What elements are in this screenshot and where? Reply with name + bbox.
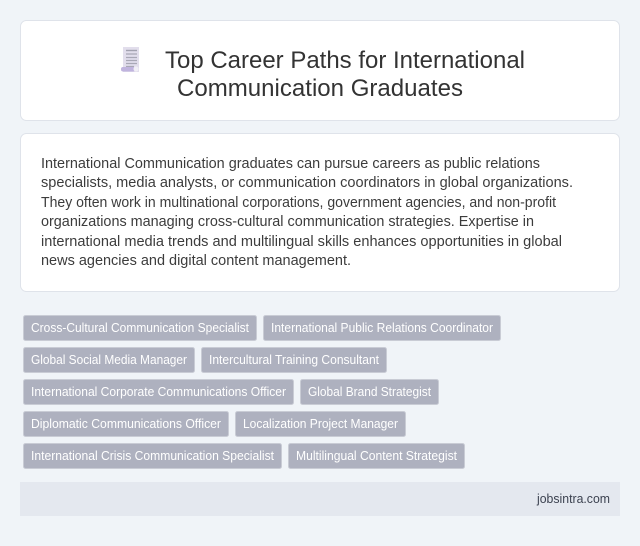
tag: Global Social Media Manager (24, 348, 194, 372)
tag: Localization Project Manager (236, 412, 406, 436)
footer source text: jobsintra.com (536, 491, 610, 506)
tag: Intercultural Training Consultant: Intercultural Training Consultant (209, 352, 379, 367)
icon: document scroll (121, 47, 139, 72)
tag: Cross-Cultural Communication Specialist: Cross-Cultural Communication Specialist (31, 320, 249, 335)
tag: Global Brand Strategist (300, 380, 438, 404)
tag: Multilingual Content Strategist: Multilingual Content Strategist (296, 448, 457, 463)
panel: title card (20, 20, 620, 120)
description text: They often work in multinational corporations, government agencies, and non-profit (41, 195, 556, 211)
title text: Communication Graduates (177, 75, 463, 102)
tag: Cross-Cultural Communication Specialist (24, 316, 256, 340)
tag: Diplomatic Communications Officer: Diplomatic Communications Officer (31, 416, 222, 431)
tag: Intercultural Training Consultant (202, 348, 386, 372)
title text (165, 47, 525, 102)
tag: International Corporate Communications Officer (24, 380, 294, 404)
tag: Diplomatic Communications Officer (24, 412, 228, 436)
title text: Top Career Paths for International (165, 47, 525, 74)
tag: Global Brand Strategist: Global Brand Strategist (308, 384, 431, 399)
tag: Global Social Media Manager: Global Social Media Manager (31, 352, 188, 367)
description text: specialists, media analysts, or communication coordinators in global organizations. (41, 175, 573, 191)
description text: news agencies and digital content management. (41, 253, 351, 269)
description text: international media trends and multilingual skills enhances opportunities in global (41, 234, 562, 250)
tag: Localization Project Manager: Localization Project Manager (243, 416, 399, 431)
career tags (24, 316, 500, 468)
tag: International Corporate Communications Officer: International Corporate Communications Officer (31, 384, 287, 399)
tag: International Crisis Communication Specialist: International Crisis Communication Specialist (31, 448, 274, 463)
tag: International Public Relations Coordinator: International Public Relations Coordinator (271, 320, 494, 335)
tag: Multilingual Content Strategist (288, 444, 464, 468)
tag: International Public Relations Coordinator (264, 316, 500, 340)
panel: description (20, 134, 620, 292)
description text: International Communication graduates can pursue careers as public relations (41, 156, 540, 172)
footer bar (20, 482, 620, 516)
description text (41, 156, 573, 269)
description text: organizations managing cross-cultural communication strategies. Expertise in (41, 214, 534, 230)
tag: International Crisis Communication Specialist (24, 444, 282, 468)
